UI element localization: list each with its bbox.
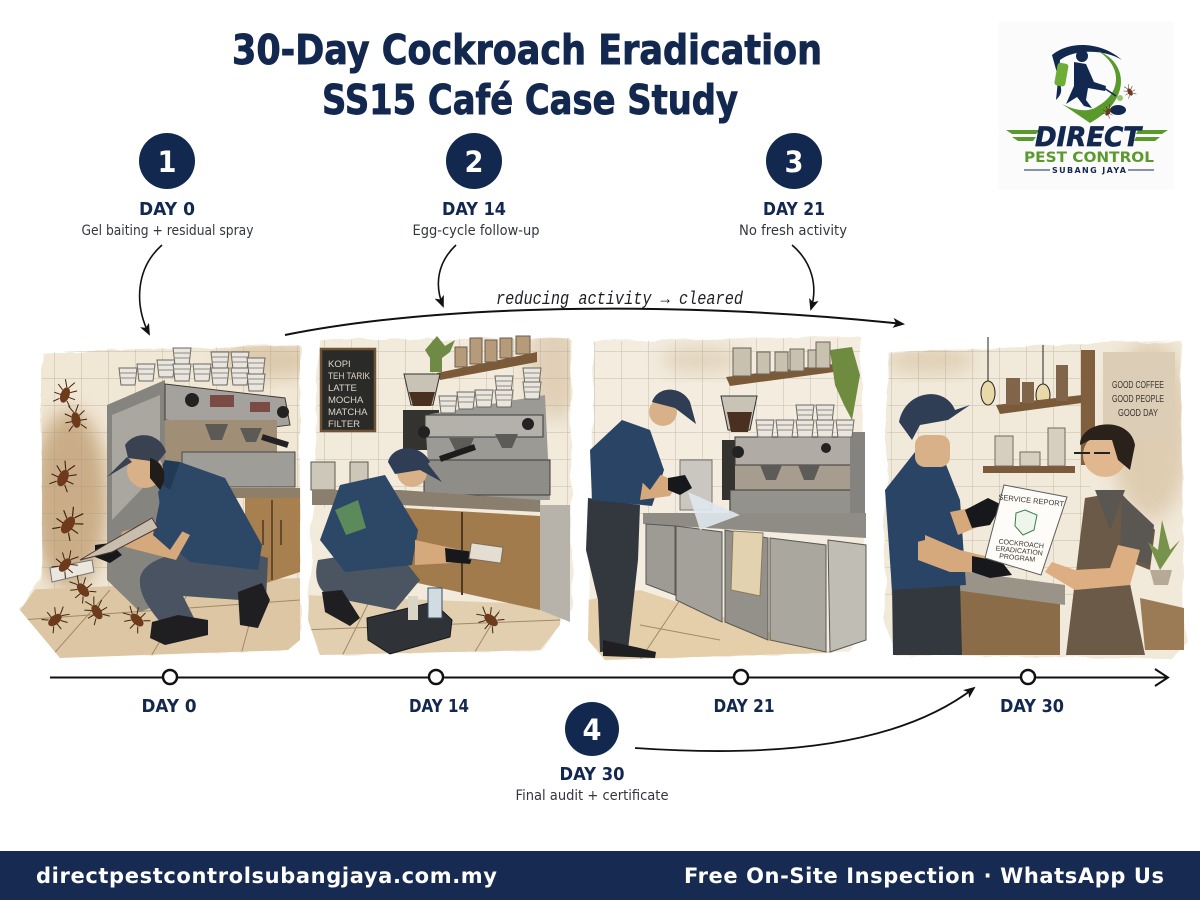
towel (731, 531, 763, 596)
step 4: Final audit + certificate (516, 788, 668, 804)
chalkboard menu: FILTER (328, 419, 360, 430)
chalkboard menu (321, 349, 375, 431)
chalkboard menu: LATTE (328, 383, 357, 394)
service report certificate: SERVICE REPORT (998, 493, 1065, 508)
marker day 30 (1000, 670, 1064, 717)
shelf and jars (726, 342, 834, 386)
marker day 30: DAY 30 (1000, 696, 1064, 717)
logo emblem (1052, 45, 1137, 123)
espresso machine (165, 384, 295, 487)
arrow: step 4 to day 30 (635, 688, 974, 751)
wall sign: GOOD COFFEE (1112, 379, 1164, 391)
title: 30-Day Cockroach Eradication (232, 26, 822, 74)
marker day 14: DAY 14 (409, 696, 469, 717)
step 3: No fresh activity (739, 223, 847, 239)
espresso machine (730, 432, 865, 518)
lower shelf and jars (983, 428, 1075, 473)
step 2: DAY 14 (442, 199, 506, 220)
wood cabinet (212, 488, 300, 590)
cockroach (472, 602, 506, 635)
upper shelf and bottles (996, 350, 1095, 465)
marker day 21: DAY 21 (714, 696, 774, 717)
technician standing (586, 390, 696, 658)
chalkboard menu: KOPI (328, 359, 351, 370)
steel cabinet (107, 380, 170, 612)
logo (998, 22, 1174, 190)
wall sign (1103, 352, 1175, 440)
logo subtitle: PEST CONTROL (1024, 150, 1154, 166)
hanging plant (830, 347, 860, 420)
step 3: 3 (784, 145, 804, 179)
bait station (50, 560, 94, 582)
service report certificate: PROGRAM (999, 553, 1036, 564)
technician crouching (316, 448, 503, 626)
cups (756, 405, 854, 437)
panel 1: gel baiting (20, 342, 320, 660)
cups (119, 348, 265, 391)
step 1: DAY 0 (139, 199, 195, 220)
shelf and jars (425, 336, 537, 380)
cups (439, 368, 541, 413)
timeline (50, 669, 1168, 717)
arrow: step 3 to panel 3 (792, 245, 814, 309)
wall sign: GOOD PEOPLE (1112, 393, 1164, 405)
progress label: reducing activity → cleared (496, 290, 743, 310)
flashlight beam (688, 492, 740, 530)
step 3: DAY 21 (763, 199, 825, 220)
marker day 0 (142, 670, 196, 717)
grinder (721, 396, 757, 500)
chalkboard menu: MATCHA (328, 407, 368, 418)
wall sign: GOOD DAY (1118, 407, 1158, 419)
step 1 (82, 133, 254, 239)
marker day 0: DAY 0 (142, 696, 196, 717)
arrow: step 2 to panel 2 (438, 245, 456, 306)
logo location: SUBANG JAYA (1052, 166, 1127, 175)
step 4: 4 (582, 713, 602, 747)
counter (955, 570, 1184, 655)
logo location (1024, 166, 1154, 175)
panel 3: inspection (586, 336, 866, 665)
step 4 (516, 702, 668, 804)
step 2 (412, 133, 540, 239)
grinder (403, 374, 440, 450)
potted plant (1148, 520, 1180, 585)
step 1: Gel baiting + residual spray (82, 223, 254, 239)
step 4: DAY 30 (560, 764, 624, 785)
step 3 (739, 133, 847, 239)
counter and steel cabinets (643, 513, 866, 652)
jars (311, 462, 368, 490)
cockroaches (40, 377, 152, 635)
step 2: 2 (464, 145, 484, 179)
toolbox (367, 588, 452, 654)
step 1: 1 (158, 145, 176, 179)
chalkboard menu: MOCHA (328, 395, 364, 406)
title: SS15 Café Case Study (322, 76, 738, 124)
espresso machine (418, 395, 550, 500)
technician (885, 394, 1012, 655)
marker day 21 (714, 670, 774, 717)
hanging lamps (981, 337, 1050, 406)
call to action: Free On-Site Inspection · WhatsApp Us (684, 864, 1164, 888)
logo wordmark: DIRECT (1035, 122, 1143, 153)
service report certificate: COCKROACH (998, 539, 1044, 550)
panel 4: certificate handover (885, 337, 1190, 658)
jar (680, 460, 712, 510)
marker day 14 (409, 670, 469, 717)
counter and cabinets (312, 490, 570, 622)
chalkboard menu: TEH TARIK (328, 371, 371, 382)
website: directpestcontrolsubangjaya.com.my (36, 864, 497, 888)
step 2: Egg-cycle follow-up (412, 223, 540, 239)
barista (1045, 424, 1155, 655)
service report certificate: ERADICATION (995, 546, 1043, 557)
technician crouching (80, 435, 270, 645)
footer band (0, 851, 1200, 900)
panel 2: follow-up (308, 336, 574, 656)
logo wings (1006, 130, 1040, 141)
arrow: step 1 to panel 1 (140, 245, 162, 334)
arrow: progress (285, 309, 903, 335)
title (232, 26, 822, 124)
service report certificate (985, 485, 1067, 575)
